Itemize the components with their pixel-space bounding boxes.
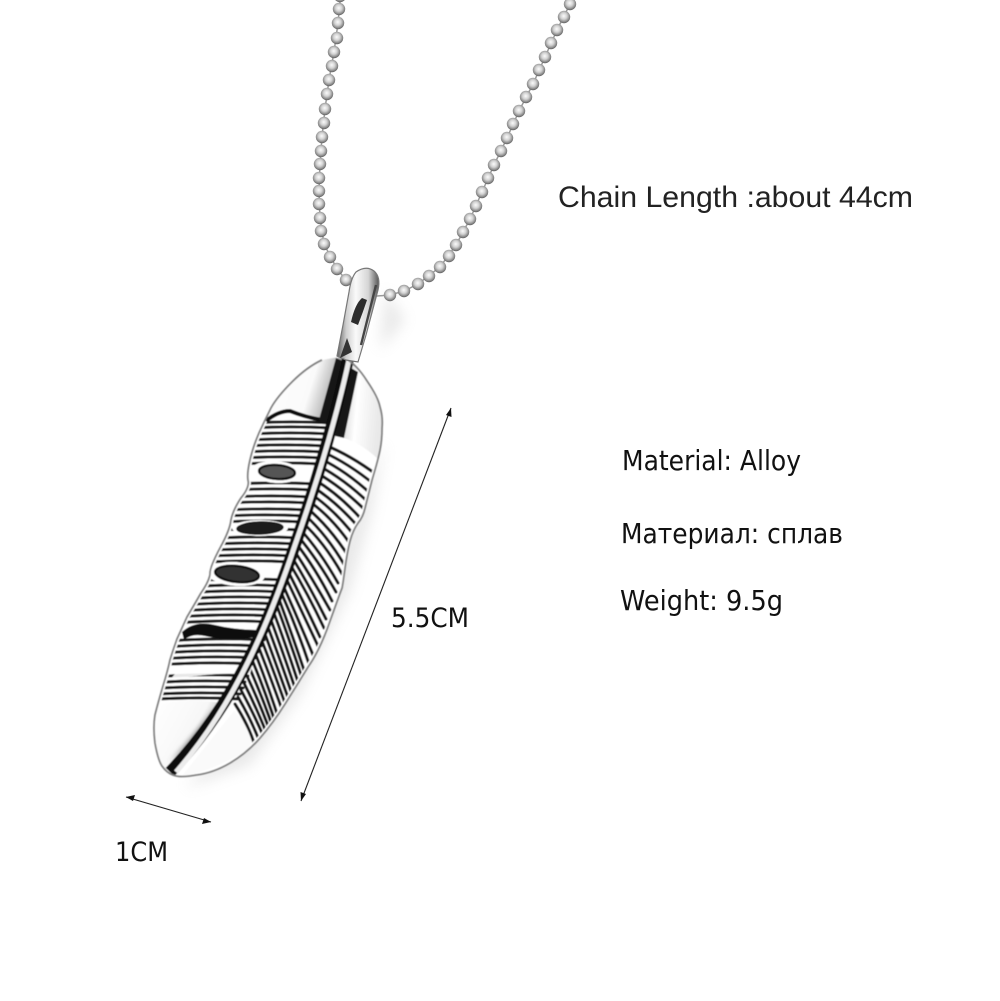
bail body: [337, 268, 379, 362]
right chain beads: [384, 0, 576, 301]
feather outline: [154, 358, 382, 776]
barb dark notch: [182, 624, 262, 640]
top left cap dark band: [266, 411, 322, 421]
top left cap: [265, 356, 345, 420]
right barbs: [235, 445, 377, 746]
shaft dark groove: [170, 340, 352, 772]
bottom left cap: [155, 701, 222, 773]
weight label: Weight: 9.5g: [620, 584, 783, 617]
feather pendant: [152, 357, 384, 778]
arrow: length dimension: [300, 408, 452, 801]
shaft top-right dark stipple: [335, 368, 358, 438]
shaft top-left dark stipple: [319, 358, 345, 424]
arrow: width dimension: [126, 795, 211, 824]
left chain beads: [313, 0, 352, 286]
barb feather hole 2: [232, 520, 288, 536]
pendant bail loop: [337, 268, 379, 362]
feather body: [154, 358, 382, 776]
chain length label: Chain Length :about 44cm: [558, 181, 913, 214]
material label: Material: Alloy: [622, 444, 801, 477]
pendant shadow: [185, 290, 405, 788]
bail neck shadow: [340, 338, 352, 358]
barb feather hole 3: [206, 560, 266, 588]
bail dark reflection: [351, 298, 367, 325]
shaft highlight: [176, 335, 354, 772]
inner edge highlight: [159, 420, 374, 745]
chain connecting wire: [319, 2, 570, 296]
left barbs: [161, 420, 373, 743]
length dimension label: 5.5CM: [391, 603, 469, 634]
bail shadow strip: [361, 285, 376, 345]
bottom left cap soft shading: [170, 708, 222, 762]
barb feather hole 1: [250, 459, 302, 485]
barb white band: [170, 666, 252, 680]
width dimension label: 1CM: [115, 837, 168, 868]
russian material label: Материал: сплав: [621, 517, 843, 550]
top right cap: [338, 360, 382, 459]
ball chain: [313, 0, 576, 301]
bottom right cap: [182, 711, 252, 776]
